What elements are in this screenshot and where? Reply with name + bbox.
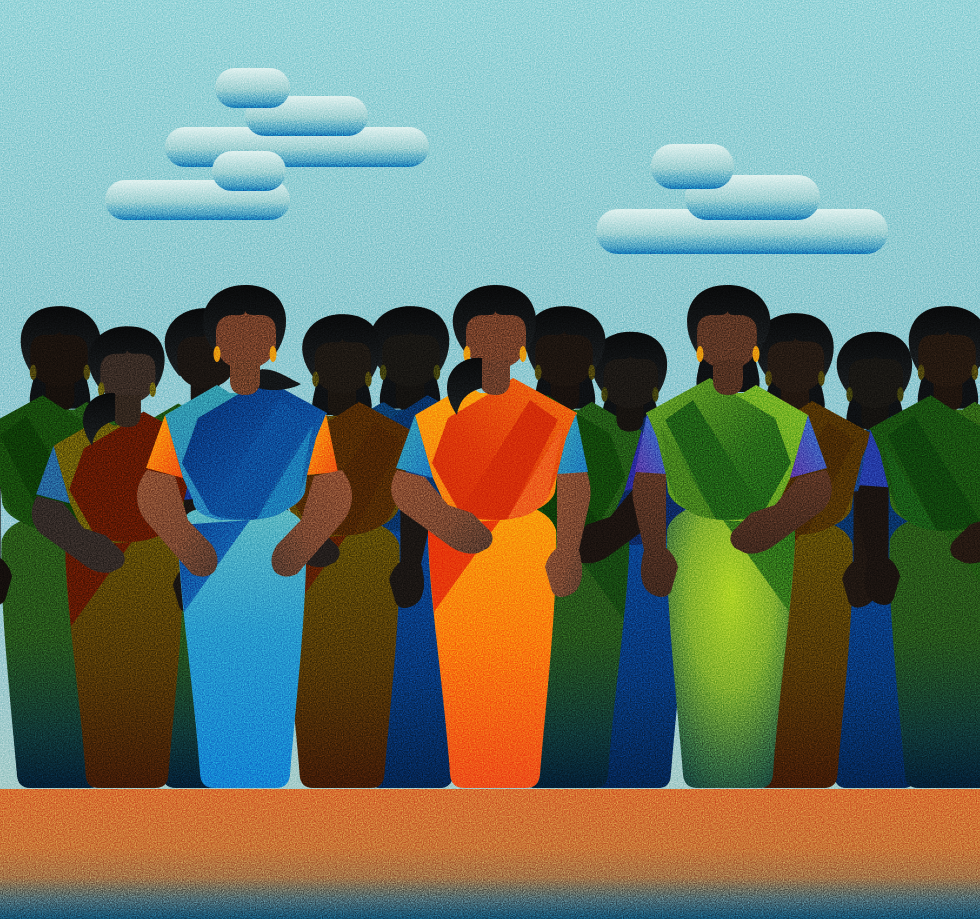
ponytail	[447, 358, 482, 415]
sleeve right	[307, 414, 338, 475]
woman: middle row, left, red and olive sari	[32, 326, 215, 788]
arm straight	[545, 472, 591, 597]
sash lower fold	[660, 425, 716, 519]
face	[466, 311, 526, 369]
drape	[428, 520, 500, 612]
arm bent	[391, 470, 493, 554]
neck over sari	[230, 360, 260, 395]
skirt	[428, 502, 556, 788]
blouse and drape	[415, 378, 577, 520]
clouds: left cluster	[105, 68, 429, 220]
blouse and drape	[646, 378, 808, 520]
skirt	[667, 502, 795, 788]
skirt	[178, 502, 306, 788]
woman: back, right of green figure, brown sari	[697, 313, 885, 788]
sash	[182, 378, 327, 520]
earrings	[214, 346, 276, 362]
woman: back, centre right, green sari	[473, 306, 664, 788]
sash lower fold	[507, 425, 563, 519]
arm right	[271, 470, 352, 577]
sleeve left	[146, 415, 183, 478]
sash lower fold	[257, 425, 313, 519]
arm straight	[632, 472, 678, 597]
blouse and drape	[165, 378, 327, 520]
woman: back, between left and centre, brown sari	[244, 314, 432, 788]
sash stripe	[460, 400, 558, 519]
face	[216, 311, 276, 369]
woman: back, centre left, blue sari	[333, 306, 489, 788]
sash	[646, 378, 791, 520]
hair dome	[687, 285, 770, 356]
woman: front centre, orange sari	[391, 285, 591, 788]
arm bent	[730, 470, 832, 554]
drape	[723, 520, 795, 612]
woman: middle row head, right of centre, in front of shoulder	[601, 355, 659, 432]
earrings	[696, 346, 760, 362]
woman: back, behind left figure, green	[129, 308, 283, 788]
ground	[0, 789, 980, 919]
woman: front left, blue sari	[137, 285, 352, 788]
clouds: right cluster	[596, 144, 888, 254]
face	[697, 311, 757, 369]
sash stripe	[665, 400, 763, 519]
hair	[696, 350, 760, 392]
woman: back, right, blue sari	[802, 332, 949, 788]
ponytail	[258, 369, 301, 390]
woman: middle row, right of centre, dark blue sari	[557, 332, 704, 788]
sleeve right	[557, 414, 588, 475]
woman: back, far left, green sari	[0, 306, 137, 788]
sash stripe	[210, 400, 308, 519]
earrings	[464, 346, 526, 362]
drape	[178, 520, 250, 612]
woman: front right, green sari	[632, 285, 832, 788]
hair	[453, 285, 536, 356]
neck	[480, 360, 510, 395]
sleeve right	[635, 414, 666, 475]
arm left	[137, 470, 218, 577]
neck	[713, 360, 743, 395]
sleeve left	[396, 415, 433, 478]
sash	[432, 378, 577, 520]
woman: back, far right, green sari	[856, 306, 980, 788]
sleeve left	[790, 415, 827, 478]
hair	[203, 285, 286, 356]
